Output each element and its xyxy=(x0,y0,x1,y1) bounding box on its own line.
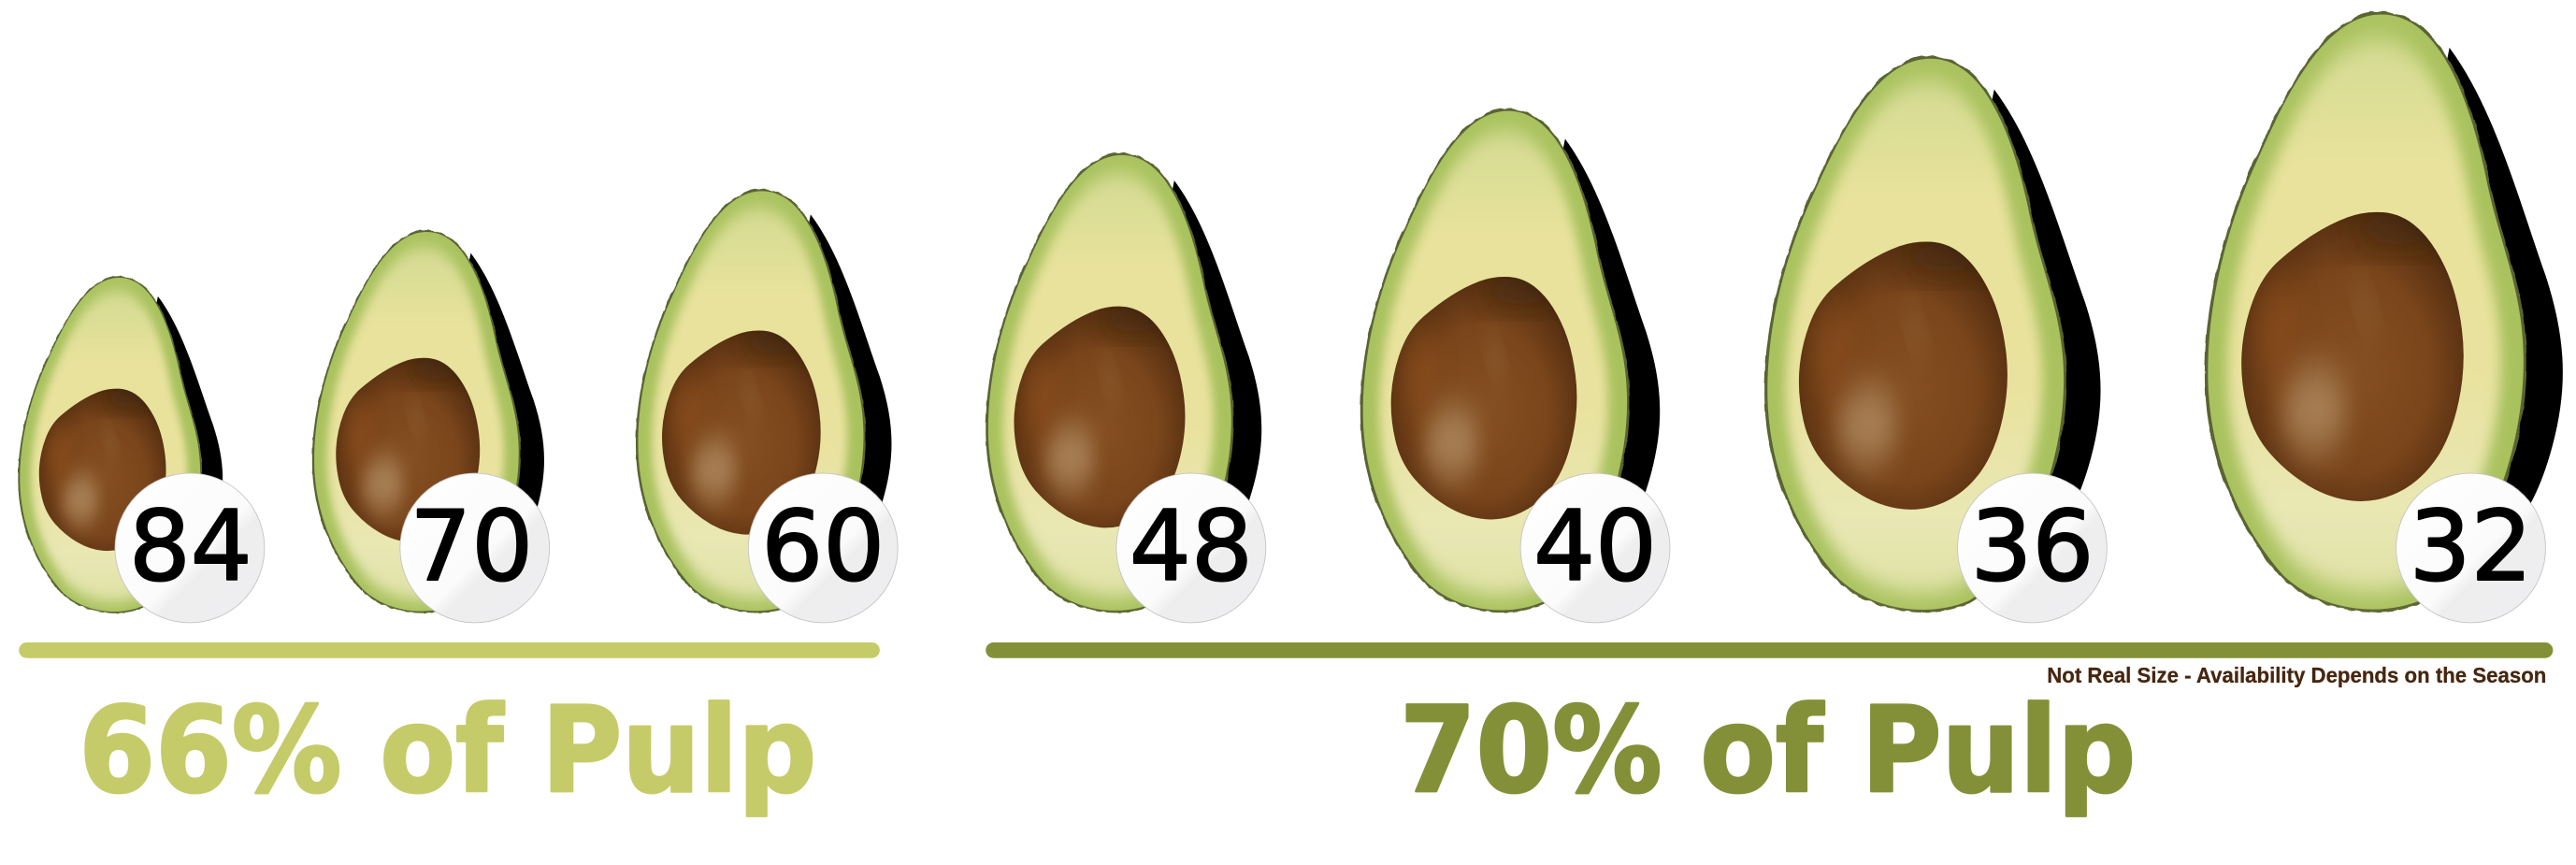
count badge 32: 32 xyxy=(2410,491,2533,603)
count badge 48 xyxy=(1116,473,1266,623)
count badge 48: 48 xyxy=(1130,491,1253,603)
group bar: 70% range xyxy=(986,642,2553,658)
avocado size 48 xyxy=(986,152,1266,623)
count badge 32 xyxy=(2396,473,2545,623)
count badge 36 xyxy=(1957,473,2107,623)
avocado size 32 xyxy=(2205,11,2563,623)
avocado size 84 xyxy=(18,276,265,623)
count badge 40: 40 xyxy=(1533,491,1657,603)
count badge 60: 60 xyxy=(761,491,885,603)
count badge 70 xyxy=(400,473,550,623)
heading: 70% of pulp: 70% of Pulp xyxy=(1400,682,2136,819)
count badge 70: 70 xyxy=(410,491,533,603)
heading: 66% of pulp: 66% of Pulp xyxy=(79,682,816,819)
count badge 84 xyxy=(115,473,265,623)
avocado size 60 xyxy=(636,189,898,623)
footnote: Not Real Size - Availability Depends on the Season xyxy=(2047,663,2546,687)
count badge 60 xyxy=(748,473,898,623)
avocado size 36 xyxy=(1764,56,2107,623)
group bar: 66% range xyxy=(19,642,880,658)
count badge 40 xyxy=(1520,473,1670,623)
count badge 36: 36 xyxy=(1970,491,2094,603)
count badge 84: 84 xyxy=(129,491,252,603)
avocado size 40 xyxy=(1360,108,1670,623)
avocado size 70 xyxy=(312,230,550,623)
